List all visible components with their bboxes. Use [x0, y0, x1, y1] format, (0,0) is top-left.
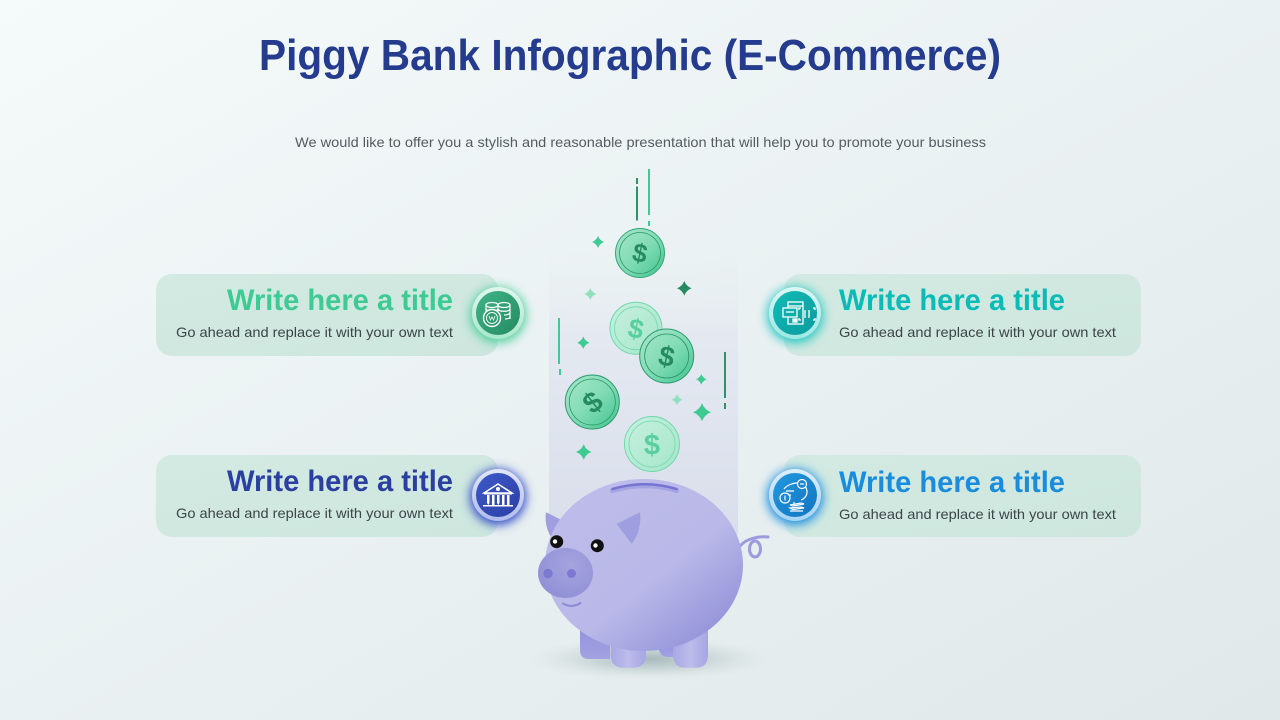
coin: middle dark: $ — [656, 340, 678, 373]
heading: top right: Write here a title — [839, 284, 1065, 317]
coin: middle light: $ — [625, 313, 646, 345]
pig smile — [563, 603, 580, 606]
sparkles — [576, 236, 711, 460]
panel: top left card — [156, 274, 498, 356]
text: bottom right: Go ahead and replace it with your own text — [839, 506, 1116, 522]
panel: top right card — [784, 274, 1141, 356]
pig snout — [538, 548, 593, 598]
pig right ear — [617, 512, 640, 544]
piggy bank — [538, 479, 768, 668]
text: top right: Go ahead and replace it with your own text — [839, 324, 1116, 340]
coin: middle dark — [640, 329, 694, 383]
panel: bottom right card — [784, 455, 1141, 537]
coin slot — [612, 484, 676, 490]
falling lines — [558, 169, 726, 409]
subtitle: We would like to offer you a stylish and reasonable presentation that will help you to promote your business — [295, 134, 986, 150]
pig tail — [740, 537, 768, 557]
pig eye left — [550, 535, 563, 548]
heading: bottom right: Write here a title — [839, 466, 1065, 499]
coin: bottom light: $ — [644, 430, 660, 462]
icon: bank badge — [470, 469, 526, 525]
coin: top: $ — [630, 237, 651, 269]
central light column — [549, 250, 738, 535]
icon: cards and payment badge — [767, 287, 823, 343]
text: top left: Go ahead and replace it with your own text — [176, 324, 453, 340]
heading: top left: Write here a title — [227, 284, 453, 317]
coin: left rotated — [565, 375, 619, 429]
pig back legs — [580, 620, 677, 659]
pig left ear — [546, 512, 560, 537]
title: Piggy Bank Infographic (E-Commerce) — [259, 31, 1001, 80]
pig eye right — [591, 539, 604, 552]
coin: top — [616, 228, 664, 278]
icon: coins badge — [470, 287, 526, 343]
coin: left rotated: $ — [577, 385, 609, 421]
text: bottom left: Go ahead and replace it with your own text — [176, 505, 453, 521]
pig front legs — [611, 630, 708, 668]
coin: bottom light — [624, 416, 680, 472]
pig shadow — [524, 637, 776, 681]
panel: bottom left card — [156, 455, 498, 537]
heading: bottom left: Write here a title — [227, 465, 453, 498]
coin: middle light — [610, 302, 662, 354]
pig body — [545, 479, 743, 651]
icon: piggy savings badge — [767, 469, 823, 525]
